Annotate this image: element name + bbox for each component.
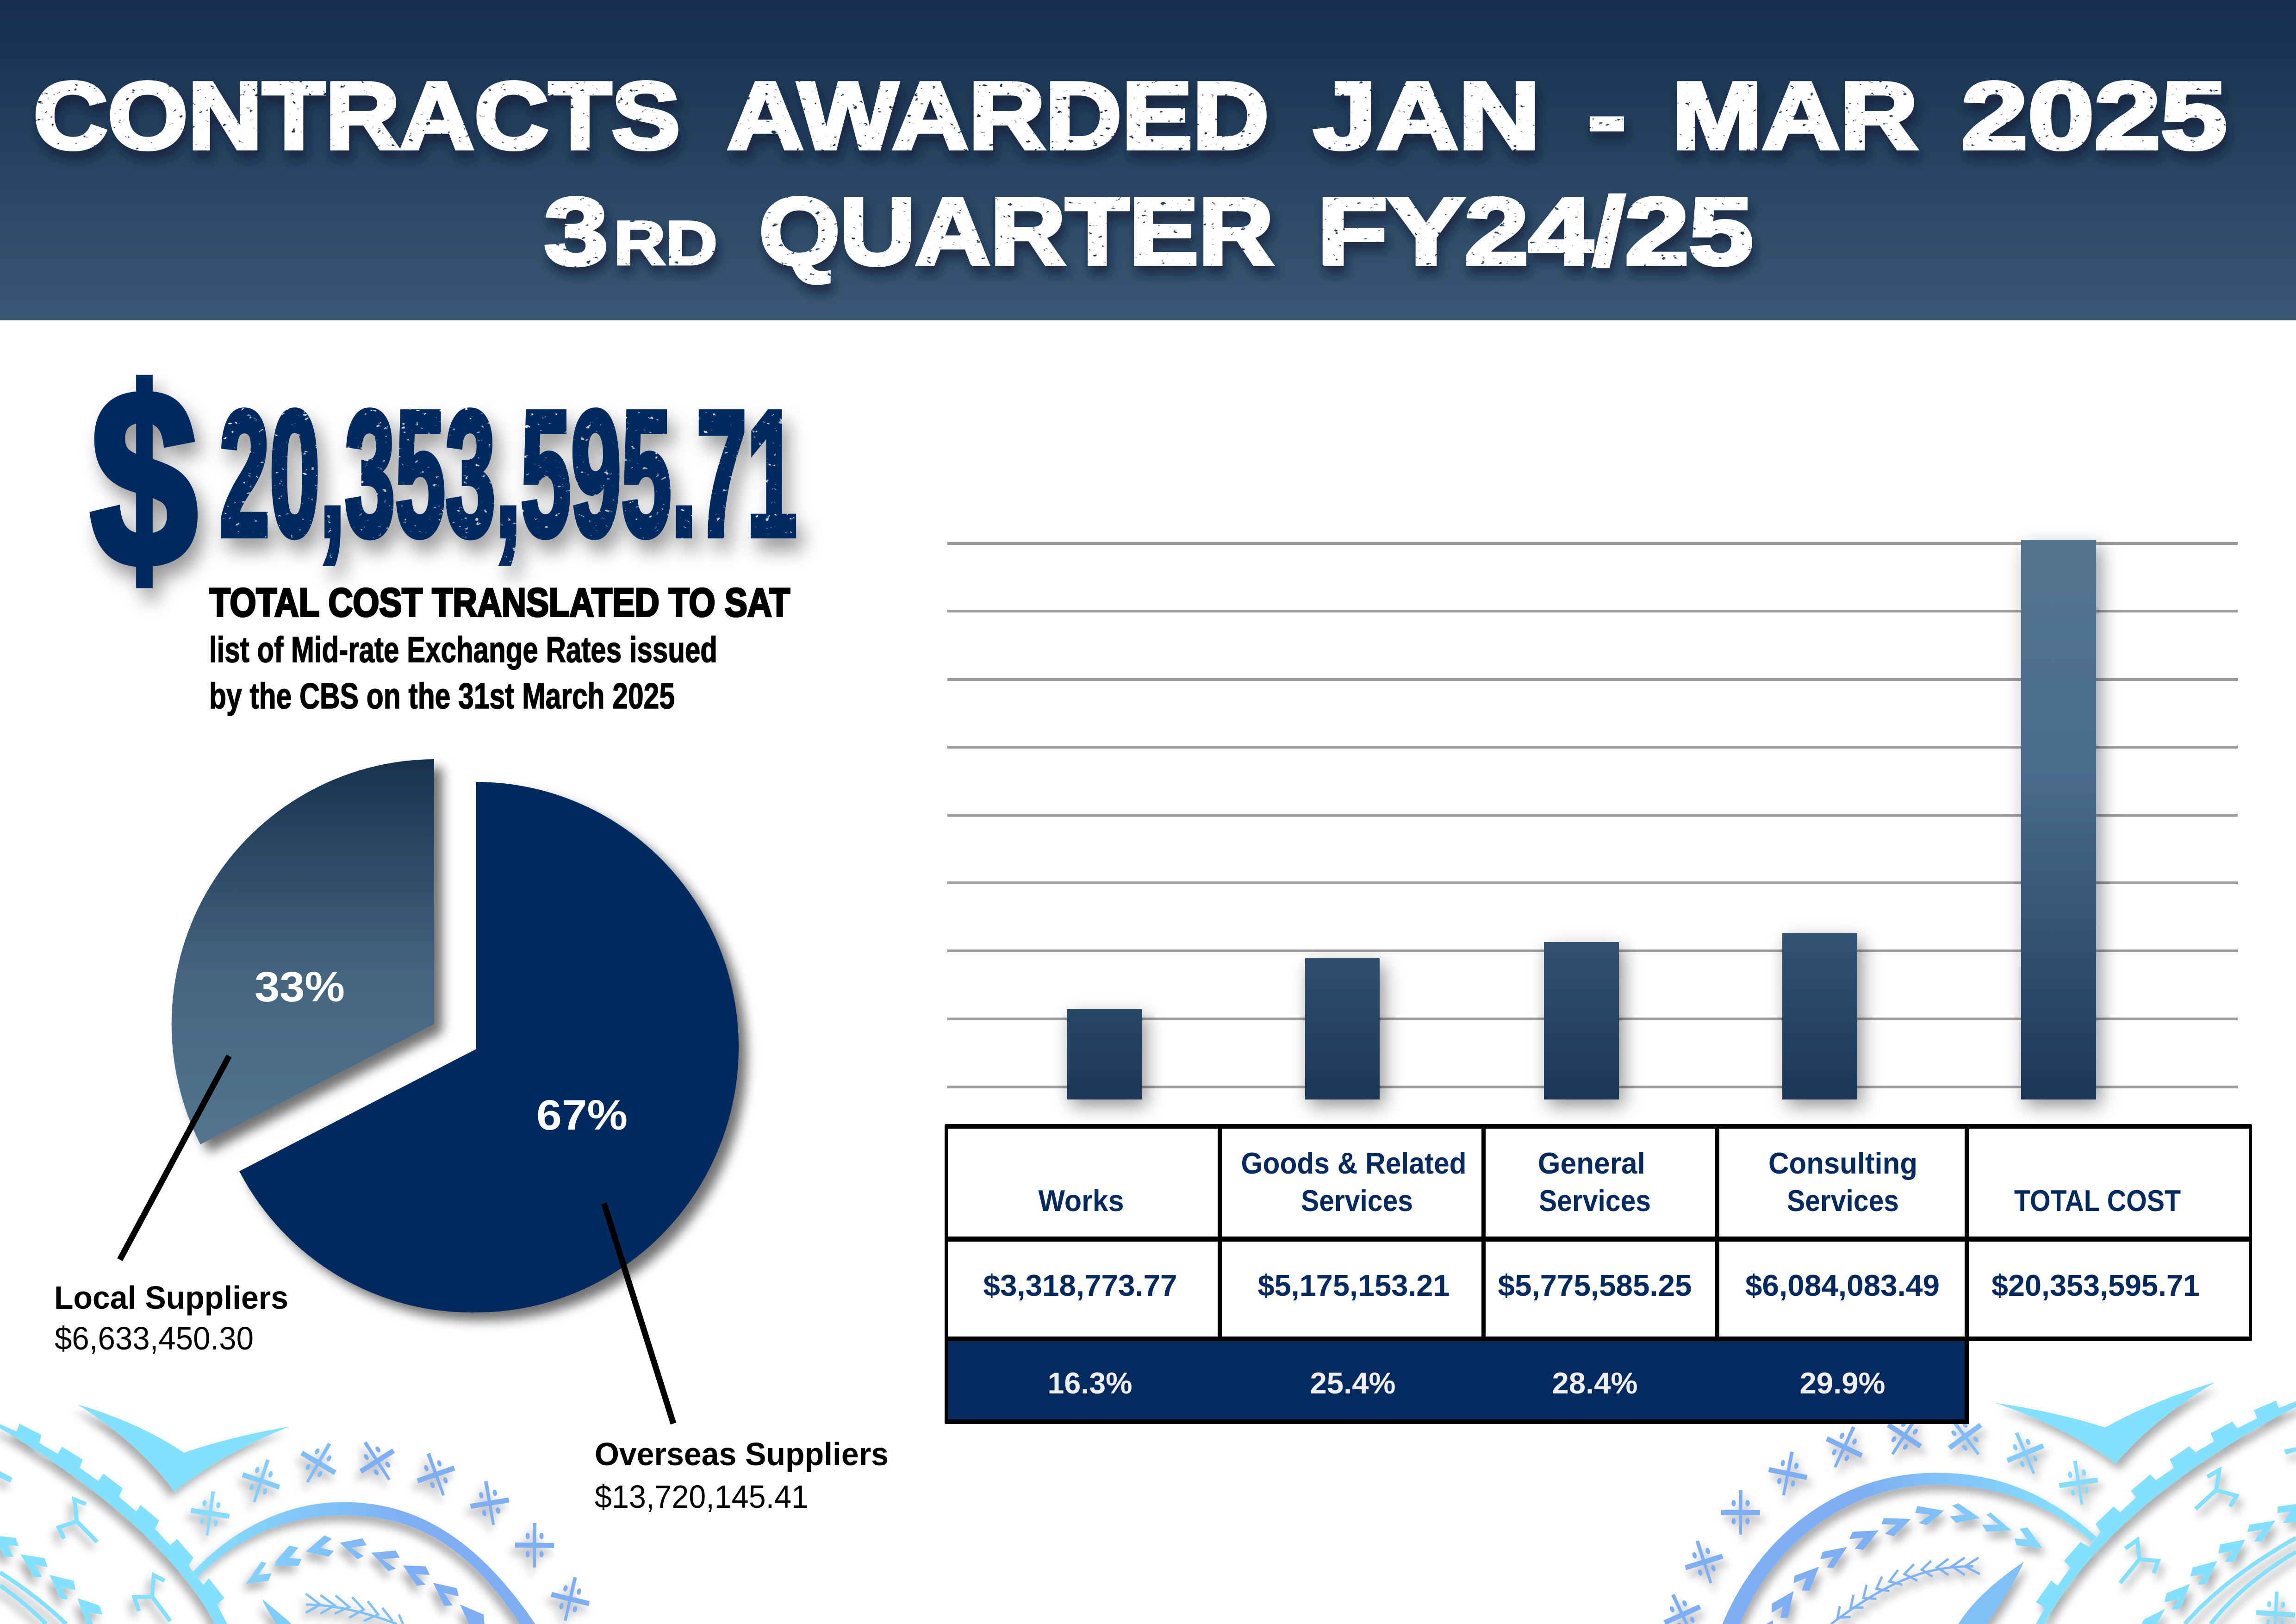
pie slice: overseas suppliers 67% xyxy=(239,782,739,1312)
amount figure: 20,353,595.71 xyxy=(219,374,797,573)
category headers: Goods & Related xyxy=(1241,1146,1466,1180)
local suppliers label: $6,633,450.30 xyxy=(55,1320,254,1356)
spike xyxy=(262,1599,292,1624)
cost values: $5,175,153.21 xyxy=(1258,1268,1450,1302)
concentric lines xyxy=(2185,1538,2296,1624)
feather xyxy=(306,1594,403,1624)
serrated curve xyxy=(2036,1400,2296,1624)
percentages: 28.4% xyxy=(1552,1366,1637,1400)
arc xyxy=(1723,1473,2097,1624)
category headers: Works xyxy=(1039,1184,1124,1218)
spike xyxy=(1958,1562,2024,1624)
title: CONTRACTS xyxy=(33,62,680,169)
arrow column xyxy=(0,1471,102,1624)
label 33%: 33% xyxy=(255,963,345,1011)
bar chart xyxy=(947,540,2238,1099)
total cost caption xyxy=(209,581,790,716)
title: AWARDED xyxy=(727,62,1269,169)
star band xyxy=(188,1432,594,1624)
dollar sign: $ xyxy=(91,338,197,618)
title: RD xyxy=(614,209,717,278)
category headers: Services xyxy=(1539,1184,1651,1218)
chevrons xyxy=(246,1536,485,1624)
concentric lines xyxy=(0,1573,66,1624)
serrated curve xyxy=(0,1424,227,1624)
overseas suppliers label xyxy=(595,1436,889,1515)
table borders xyxy=(945,1124,2252,1424)
arrowhead V xyxy=(78,1405,289,1492)
arrowhead V xyxy=(1995,1382,2215,1464)
percentages xyxy=(1048,1366,1885,1400)
overseas suppliers label: $13,720,145.41 xyxy=(595,1479,809,1515)
title xyxy=(33,62,2227,285)
title: FY24/25 xyxy=(1317,178,1753,285)
arc xyxy=(193,1502,535,1624)
Y marks xyxy=(2120,1470,2236,1583)
percentages: 25.4% xyxy=(1310,1366,1396,1400)
category headers xyxy=(1039,1146,2181,1218)
total cost caption: list of Mid-rate Exchange Rates issued xyxy=(209,629,717,670)
star band xyxy=(1655,1406,2296,1624)
local suppliers label xyxy=(54,1280,288,1356)
pie chart xyxy=(120,759,739,1424)
Y marks xyxy=(59,1499,170,1621)
cost values xyxy=(983,1268,2200,1302)
local suppliers label: Local Suppliers xyxy=(54,1280,288,1316)
category headers: Consulting xyxy=(1768,1146,1917,1180)
cost values: $6,084,083.49 xyxy=(1745,1268,1940,1302)
feather xyxy=(1831,1558,1980,1624)
percentages: 29.9% xyxy=(1799,1366,1885,1400)
total cost caption: by the CBS on the 31st March 2025 xyxy=(209,675,675,716)
pie slice: local suppliers 33% xyxy=(172,759,434,1144)
percentages: 16.3% xyxy=(1048,1366,1132,1400)
header banner xyxy=(0,0,2296,320)
arrow column xyxy=(2141,1447,2296,1624)
title: 2025 xyxy=(1961,62,2227,169)
category headers: Services xyxy=(1301,1184,1413,1218)
overseas suppliers label: Overseas Suppliers xyxy=(595,1436,889,1472)
total cost caption: TOTAL COST TRANSLATED TO SAT xyxy=(210,581,790,625)
total amount xyxy=(91,338,797,618)
gridlines xyxy=(947,543,2238,1087)
cost values: $20,353,595.71 xyxy=(1991,1268,2200,1302)
title: QUARTER xyxy=(759,178,1274,285)
percentage row background xyxy=(946,1339,1966,1421)
category headers: TOTAL COST xyxy=(2014,1184,2181,1218)
category headers: Services xyxy=(1787,1184,1899,1218)
title: 3 xyxy=(544,178,608,285)
category headers: General xyxy=(1538,1146,1645,1180)
leader line: overseas suppliers xyxy=(604,1203,673,1424)
cost values: $5,775,585.25 xyxy=(1498,1268,1692,1302)
bars xyxy=(1067,540,2096,1099)
data table xyxy=(945,1124,2252,1424)
decorative pattern: bottom left xyxy=(0,1405,594,1624)
cost values: $3,318,773.77 xyxy=(983,1268,1177,1302)
chevrons xyxy=(1767,1503,2042,1624)
decorative pattern: bottom right xyxy=(1655,1382,2296,1624)
label 67%: 67% xyxy=(536,1092,628,1139)
title: JAN xyxy=(1313,62,1540,169)
title: MAR xyxy=(1672,62,1918,169)
leader line: local suppliers xyxy=(120,1056,229,1260)
title: - xyxy=(1587,62,1626,169)
